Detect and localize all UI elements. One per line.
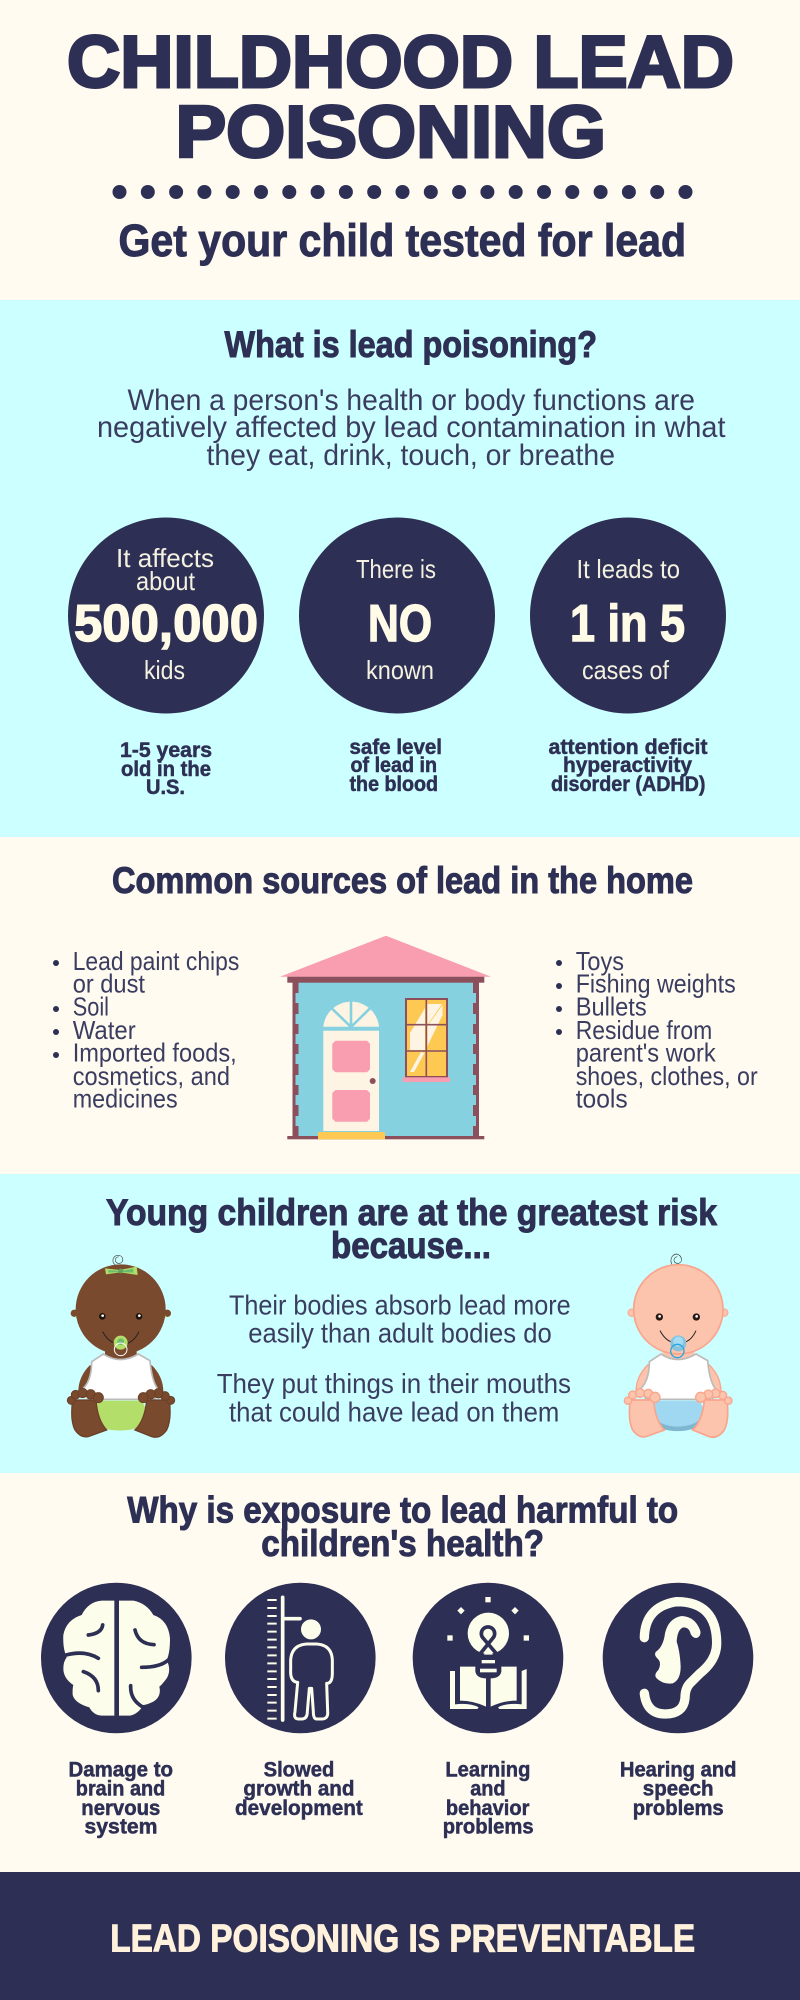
caption: 1-5 years old: U.S.: [146, 776, 185, 799]
stat circle: 500,000 kids: [68, 518, 264, 714]
caption: ADHD: hyperactivity: [563, 754, 692, 777]
icon: baby boy: [624, 1254, 732, 1437]
title: POISONING: [176, 92, 606, 173]
definition text: [97, 384, 726, 472]
list: right sources: parent's work: [576, 1038, 717, 1068]
caption: ADHD: [548, 736, 708, 796]
panel: what is lead poisoning: [0, 300, 800, 837]
text: reasons: that could have lead on them: [229, 1397, 559, 1428]
text: reasons: Their bodies absorb lead more: [229, 1289, 571, 1320]
caption: slowed growth: [235, 1759, 363, 1820]
panel: common sources: [0, 837, 800, 1174]
list: right sources: shoes, clothes, or: [576, 1061, 758, 1091]
caption: safe level: safe level: [350, 736, 442, 759]
subtitle: Get your child tested for lead: [118, 215, 686, 266]
caption: brain damage: [68, 1759, 173, 1838]
icon: child height chart: [225, 1583, 376, 1733]
heading: young children: Young children are at the greatest risk: [106, 1192, 717, 1233]
icon: brain: [41, 1583, 192, 1733]
list: left sources: cosmetics, and: [73, 1061, 230, 1091]
footer text: LEAD POISONING IS PREVENTABLE: [110, 1918, 695, 1961]
list: left sources: Imported foods,: [73, 1038, 237, 1068]
list: right sources: Bullets: [576, 992, 647, 1022]
list: right sources: tools: [576, 1084, 628, 1114]
heading: why is exposure harmful: children's health?: [261, 1523, 544, 1564]
caption: brain damage: Damage to: [68, 1759, 173, 1782]
icon: ear: [603, 1583, 753, 1733]
list: left sources: Soil: [73, 992, 109, 1022]
panel: footer banner: [0, 1872, 800, 2000]
list: left sources: Lead paint chips: [73, 946, 239, 976]
stat circle: 500,000 kids: about: [136, 566, 196, 596]
heading: young children: [106, 1192, 717, 1266]
caption: learning and behavior: and: [470, 1778, 506, 1801]
caption: learning and behavior: Learning: [445, 1759, 530, 1782]
dotted divider: [112, 185, 692, 199]
caption: learning and behavior: [443, 1759, 534, 1838]
title: CHILDHOOD LEAD: [67, 22, 734, 103]
stat circle: 1 in 5: [530, 518, 726, 714]
caption: slowed growth: growth and: [243, 1778, 354, 1801]
caption: brain damage: system: [84, 1815, 158, 1838]
caption: slowed growth: Slowed: [264, 1759, 334, 1782]
stat circle: 1 in 5: 1 in 5: [570, 595, 685, 653]
list: right sources: Residue from: [576, 1015, 712, 1045]
caption: hearing and speech: problems: [633, 1797, 724, 1820]
list: right sources: [556, 946, 758, 1114]
stat circle: 500,000 kids: 500,000: [74, 595, 258, 653]
heading: what is lead poisoning: What is lead poisoning?: [224, 324, 597, 365]
panel: title header: [0, 0, 800, 300]
heading: why is exposure harmful: Why is exposure to lead harmful to: [127, 1490, 678, 1531]
caption: 1-5 years old: old in the: [121, 758, 211, 781]
caption: ADHD: attention deficit: [548, 736, 708, 759]
caption: 1-5 years old: 1-5 years: [120, 739, 212, 762]
list: left sources: medicines: [73, 1084, 178, 1114]
caption: 1-5 years old: [120, 739, 212, 799]
caption: safe level: [350, 736, 442, 796]
definition text: When a person's health or body functions are: [128, 384, 695, 417]
heading: common sources: Common sources of lead in the home: [112, 860, 693, 901]
stat circle: no known: There is: [356, 554, 436, 584]
stat circle: 500,000 kids: kids: [144, 655, 185, 685]
icon: house: [280, 936, 491, 1139]
panel: greatest risk: [0, 1174, 800, 1473]
caption: brain damage: brain and: [76, 1778, 165, 1801]
panel: why harmful: [0, 1473, 800, 1872]
heading: why is exposure harmful: [127, 1490, 678, 1564]
caption: safe level: of lead in: [350, 754, 437, 777]
list: left sources: Water: [73, 1015, 136, 1045]
list: left sources: or dust: [73, 969, 146, 999]
text: reasons: [217, 1289, 571, 1428]
text: reasons: easily than adult bodies do: [248, 1318, 552, 1349]
icon: baby girl: [67, 1255, 175, 1437]
stat circle: 500,000 kids: It affects: [116, 543, 214, 573]
icon: light bulb and book: [413, 1583, 563, 1733]
heading: young children: because...: [331, 1225, 491, 1266]
title: [67, 22, 734, 173]
stat circle: no known: known: [366, 655, 434, 685]
list: left sources: [53, 946, 239, 1114]
stat circle: 1 in 5: cases of: [582, 655, 670, 685]
caption: safe level: the blood: [350, 773, 438, 796]
list: right sources: Fishing weights: [576, 969, 736, 999]
caption: learning and behavior: problems: [443, 1815, 534, 1838]
caption: ADHD: disorder (ADHD): [551, 773, 706, 796]
list: right sources: Toys: [576, 946, 624, 976]
caption: hearing and speech: [620, 1759, 736, 1820]
caption: brain damage: nervous: [81, 1797, 160, 1820]
caption: slowed growth: development: [235, 1797, 363, 1820]
stat circle: no known: [299, 518, 495, 714]
caption: hearing and speech: speech: [643, 1778, 714, 1801]
definition text: negatively affected by lead contamination in what: [97, 411, 726, 444]
caption: hearing and speech: Hearing and: [620, 1759, 736, 1782]
definition text: they eat, drink, touch, or breathe: [206, 439, 615, 472]
stat circle: no known: NO: [368, 595, 432, 653]
stat circle: 1 in 5: It leads to: [576, 554, 680, 584]
text: reasons: They put things in their mouths: [217, 1368, 571, 1399]
caption: learning and behavior: behavior: [446, 1797, 529, 1820]
